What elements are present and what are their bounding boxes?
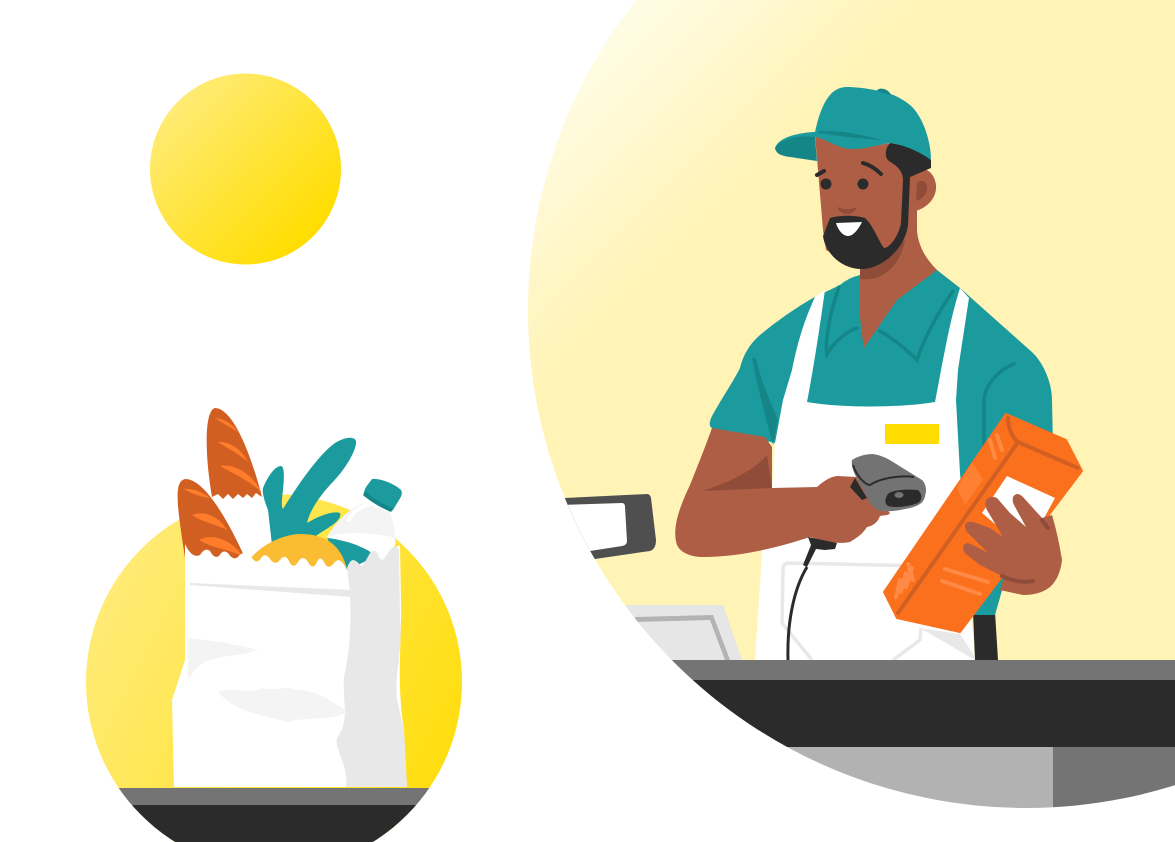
- cashier: [675, 87, 1082, 660]
- scene: grocery bag in circle: [86, 408, 462, 842]
- orange product box: [884, 414, 1082, 632]
- checkout counter: [118, 788, 430, 842]
- face: [815, 137, 900, 252]
- yellow backdrop circle: [86, 494, 462, 842]
- cap: [775, 87, 931, 161]
- name badge: [885, 424, 939, 444]
- baguette back: [207, 408, 262, 499]
- bottle: [327, 479, 402, 565]
- card terminal: [560, 494, 656, 559]
- shirt: [710, 270, 1053, 615]
- ear: [915, 170, 936, 210]
- neck: [859, 170, 937, 348]
- paper bag: [172, 544, 407, 787]
- baguette front: [178, 479, 246, 565]
- cash register screen: [620, 605, 742, 660]
- sun circle: [150, 74, 341, 264]
- teal leaf behind bag: [327, 538, 372, 572]
- counter base dark: [1053, 747, 1175, 808]
- checkout counter top: [650, 660, 1175, 680]
- nose: [837, 207, 857, 214]
- pale yellow background: [520, 0, 1175, 842]
- counter base light: [788, 747, 1053, 808]
- scene: cashier in large circle: [520, 0, 1175, 842]
- trousers: [973, 612, 998, 660]
- yellow bread bun: [251, 534, 347, 572]
- arm: [675, 428, 890, 557]
- shirt folds: [826, 287, 1014, 470]
- checkout counter front: [650, 680, 1175, 747]
- barcode scanner: [788, 454, 926, 660]
- apron pocket: [782, 563, 921, 660]
- box label: [982, 476, 1055, 527]
- hair and beard: [823, 143, 931, 269]
- holding hand: [963, 494, 1062, 595]
- eyes and brows: [817, 163, 881, 190]
- smile: [836, 222, 862, 236]
- back paper bag: [185, 492, 275, 565]
- apron: [755, 288, 975, 660]
- leafy greens: [263, 438, 356, 550]
